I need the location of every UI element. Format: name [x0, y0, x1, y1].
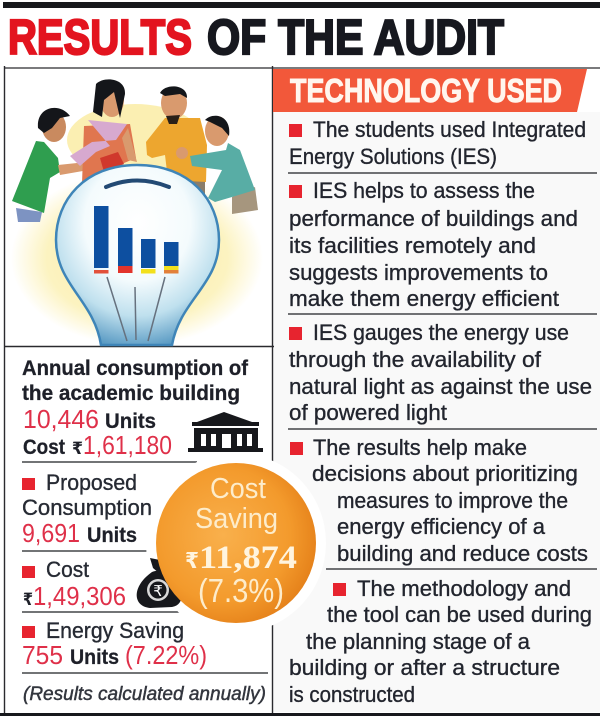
panel: energy saving: Units — [70, 646, 119, 669]
panel: annual consumption: Annual consumption of — [22, 357, 249, 380]
icon: academic building — [188, 412, 263, 452]
panel: annual consumption: the academic building — [22, 382, 240, 405]
text block: IES gauges energy use: natural light as against the use — [289, 374, 592, 399]
callout: cost saving circle: 11,874 — [199, 540, 297, 576]
panel: proposed cost: 1,49,306 — [33, 581, 126, 611]
top black bar — [3, 2, 600, 8]
title: OF THE AUDIT — [207, 11, 504, 65]
text block: methodology and tool: the tool can be used during — [327, 602, 592, 627]
text block: students used IES: The students used Integrated — [313, 117, 586, 142]
bar chart inside bulb — [94, 206, 178, 274]
text block: methodology and tool: building or after a structure — [289, 655, 560, 680]
figure: boy in green shirt — [12, 108, 100, 222]
text block: methodology and tool: The methodology and — [357, 576, 571, 601]
panel: proposed consumption — [22, 470, 152, 551]
callout: cost saving circle: Cost — [210, 473, 266, 505]
callout halo — [146, 453, 326, 633]
yellow glow behind bulb — [11, 104, 263, 346]
panel: annual consumption: 10,446 — [23, 404, 99, 434]
panel: energy saving: (7.22%) — [125, 640, 207, 670]
text block: IES assesses performance — [288, 178, 597, 314]
text block: IES assesses performance: suggests improvements to — [289, 260, 548, 285]
text block: results help decisions: measures to improve the — [337, 488, 568, 513]
text block: results help decisions: decisions about prioritizing — [312, 461, 578, 486]
text block: IES assesses performance: make them energy efficient — [289, 286, 560, 311]
callout: cost saving circle: (7.3%) — [198, 572, 284, 609]
callout: cost saving circle: Saving — [195, 503, 278, 535]
figure: woman with lilac scarf — [70, 79, 137, 184]
panel: energy saving: Energy Saving — [46, 618, 184, 643]
text block: IES assesses performance: performance of buildings and — [289, 206, 578, 231]
note: results calculated annually: (Results calculated annually) — [23, 684, 266, 705]
illustration: students around a light bulb — [11, 79, 263, 346]
light bulb with bar chart — [56, 165, 219, 345]
text block: IES assesses performance: its facilities remotely and — [289, 233, 536, 258]
icon: rupee money bag — [137, 558, 182, 608]
text block: results help decisions: building and reduce costs — [337, 541, 588, 566]
panel: proposed consumption: Units — [87, 524, 137, 547]
text block: methodology and tool — [289, 576, 592, 707]
text block: IES gauges energy use: IES gauges the energy use — [313, 320, 569, 345]
title — [8, 11, 504, 65]
text block: results help decisions: energy efficiency of a — [337, 514, 545, 539]
callout: cost saving circle — [156, 463, 316, 623]
panel: proposed consumption: Proposed — [46, 470, 137, 495]
text block: IES gauges energy use: of powered light — [289, 400, 448, 425]
text block: IES gauges energy use: through the availability of — [289, 347, 542, 372]
figure: man in orange shirt — [146, 86, 207, 198]
text block: IES gauges energy use — [288, 320, 597, 429]
panel: proposed consumption: 9,691 — [22, 518, 80, 548]
icon: rupee money bag: ₹ — [153, 582, 163, 600]
panel: proposed cost: ₹ — [23, 590, 33, 610]
text block: methodology and tool: the planning stage of a — [306, 629, 530, 654]
panel: annual consumption: Cost — [23, 436, 65, 459]
text block: methodology and tool: is constructed — [289, 682, 415, 707]
panel: energy saving: 755 — [22, 640, 63, 670]
text block: results help decisions — [290, 435, 597, 569]
figure: boy in teal sweater — [176, 116, 258, 214]
panel: annual consumption: Units — [105, 410, 156, 433]
text block: IES assesses performance: IES helps to assess the — [313, 178, 535, 203]
panel: energy saving — [22, 618, 268, 673]
callout: cost saving circle: ₹ — [185, 549, 199, 574]
text block: students used IES: Energy Solutions (IES) — [289, 144, 497, 169]
title: RESULTS — [8, 11, 192, 65]
panel: annual consumption — [22, 357, 249, 462]
panel: proposed cost: Cost — [46, 557, 90, 582]
text block: students used IES — [288, 117, 597, 173]
panel: proposed consumption: Consumption — [22, 495, 152, 520]
panel: annual consumption: ₹ — [72, 439, 83, 459]
panel: proposed cost — [22, 557, 182, 612]
panel: annual consumption: 1,61,180 — [83, 430, 172, 460]
text block: results help decisions: The results help make — [313, 435, 527, 460]
